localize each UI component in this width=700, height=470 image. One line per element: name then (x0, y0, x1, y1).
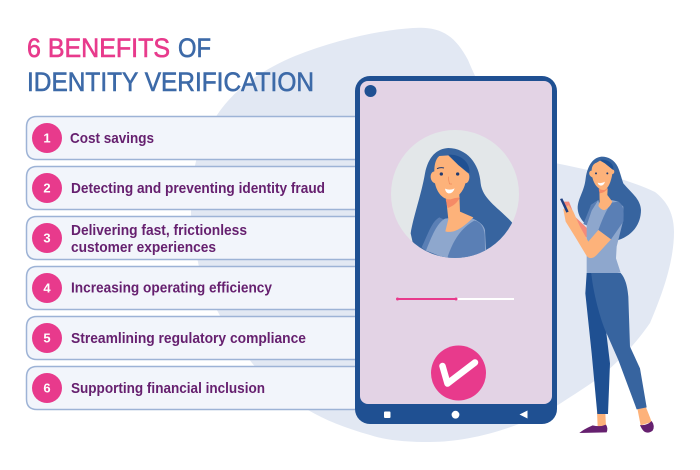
title: OF (178, 33, 211, 63)
phone (355, 76, 557, 424)
benefit 3: customer experiences (71, 239, 216, 256)
feet (597, 412, 606, 427)
benefit 5: Streamlining regulatory compliance (71, 330, 306, 347)
face (589, 161, 614, 190)
benefit 2: 2 (43, 180, 51, 196)
benefit 4: 4 (43, 280, 51, 296)
benefit 4: Increasing operating efficiency (71, 280, 273, 296)
near arm (563, 205, 611, 258)
hair (578, 157, 641, 240)
benefit 4 (26, 266, 360, 310)
title (27, 33, 314, 97)
standing woman (560, 157, 654, 433)
benefit 6: 6 (43, 380, 51, 396)
benefit 5 (26, 316, 360, 360)
phone screen (360, 81, 552, 404)
far arm (562, 202, 587, 238)
background blob (191, 28, 674, 442)
benefit 2: Detecting and preventing identity fraud (71, 180, 325, 197)
benefit 1: 1 (43, 130, 51, 146)
benefits list (26, 116, 360, 410)
title: IDENTITY VERIFICATION (27, 67, 314, 97)
benefit 3: Delivering fast, frictionless (71, 222, 247, 239)
nav buttons (384, 410, 528, 419)
phone in hand (560, 198, 569, 213)
neck (598, 188, 612, 210)
benefit 1: Cost savings (70, 130, 154, 147)
benefit 3 (26, 216, 360, 260)
avatar portrait (391, 130, 519, 260)
progress bar (396, 298, 514, 300)
sleeve (598, 202, 624, 239)
benefit 3: 3 (43, 230, 51, 246)
check badge (431, 346, 486, 400)
benefit 6 (26, 366, 360, 410)
benefit 5: 5 (43, 330, 51, 346)
benefit 2 (26, 166, 360, 210)
title: 6 BENEFITS (27, 33, 170, 63)
shirt shade (583, 200, 598, 225)
benefit 1 (26, 116, 360, 160)
shirt (587, 200, 623, 275)
benefit 6: Supporting financial inclusion (71, 380, 265, 397)
camera dot (364, 85, 376, 97)
legs (585, 273, 610, 414)
